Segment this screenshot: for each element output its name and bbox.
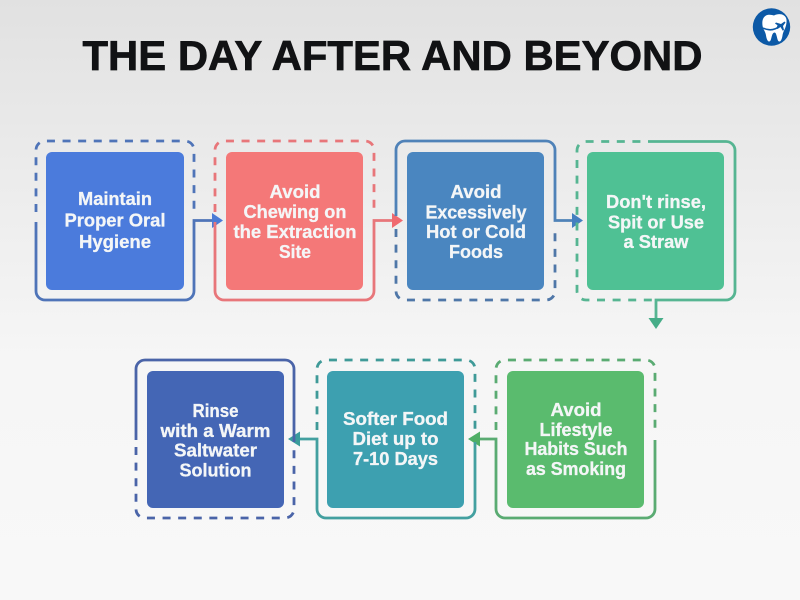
- arrow: step 4 to step 7: [648, 318, 664, 329]
- panel: step 5 rinse with a warm saltwater solution: with a Warm: [159, 421, 270, 441]
- panel: step 4 don't rinse, spit or use a straw: Spit or Use: [608, 212, 704, 232]
- panel: step 2 avoid chewing on the extraction site: Avoid: [270, 182, 320, 202]
- icon: tooth and plane logo: [753, 8, 790, 46]
- panel: step 3 avoid excessively hot or cold foods: Hot or Cold: [426, 222, 526, 242]
- panel: step 1 maintain proper oral hygiene: [36, 141, 223, 300]
- panel: step 1 maintain proper oral hygiene: Maintain: [78, 189, 152, 209]
- panel: step 4 don't rinse, spit or use a straw: [577, 142, 735, 329]
- panel: step 5 rinse with a warm saltwater solution: Rinse: [192, 401, 238, 421]
- panel: step 2 avoid chewing on the extraction site: Chewing on: [244, 202, 346, 222]
- panel: step 7 avoid lifestyle habits such as smoking: as Smoking: [526, 459, 626, 479]
- panel: step 3 avoid excessively hot or cold foods: Foods: [449, 242, 503, 262]
- panel: step 4 don't rinse, spit or use a straw: Don't rinse,: [606, 192, 706, 212]
- panel: step 2 avoid chewing on the extraction site: Site: [279, 242, 311, 262]
- panel: step 5 rinse with a warm saltwater solution: Saltwater: [174, 440, 257, 460]
- panel: step 3 avoid excessively hot or cold foods: Excessively: [426, 202, 526, 222]
- panel: step 7 avoid lifestyle habits such as smoking: Avoid: [550, 400, 602, 420]
- panel: step 6 softer food diet up to 7-10 days: Diet up to: [352, 429, 438, 449]
- arrow: step 6 to step 5: [288, 432, 300, 446]
- panel: step 1 maintain proper oral hygiene: Proper Oral: [64, 210, 166, 230]
- panel: step 3 avoid excessively hot or cold foods: Avoid: [450, 182, 502, 202]
- panel: step 6 softer food diet up to 7-10 days: Softer Food: [343, 409, 448, 429]
- panel: step 2 avoid chewing on the extraction site: the Extraction: [234, 222, 356, 242]
- panel: step 3 avoid excessively hot or cold foods: [396, 141, 583, 300]
- panel: step 7 avoid lifestyle habits such as smoking: [468, 360, 655, 518]
- panel: step 7 avoid lifestyle habits such as smoking: Lifestyle: [540, 420, 612, 440]
- panel: step 4 don't rinse, spit or use a straw: a Straw: [624, 232, 690, 252]
- panel: step 5 rinse with a warm saltwater solution: [136, 360, 294, 518]
- arrow: step 7 to step 6: [468, 432, 480, 446]
- panel: step 7 avoid lifestyle habits such as smoking: Habits Such: [524, 439, 628, 459]
- panel: step 6 softer food diet up to 7-10 days: 7-10 Days: [353, 449, 438, 469]
- arrow: step 2 to step 3: [392, 213, 403, 228]
- panel: step 1 maintain proper oral hygiene: Hygiene: [79, 232, 151, 252]
- arrow: step 3 to step 4: [572, 213, 583, 228]
- panel: step 5 rinse with a warm saltwater solution: Solution: [180, 460, 252, 480]
- title: THE DAY AFTER AND BEYOND: [82, 32, 702, 79]
- panel: step 6 softer food diet up to 7-10 days: [288, 360, 475, 518]
- arrow: step 1 to step 2: [212, 213, 223, 228]
- panel: step 2 avoid chewing on the extraction site: [215, 141, 403, 300]
